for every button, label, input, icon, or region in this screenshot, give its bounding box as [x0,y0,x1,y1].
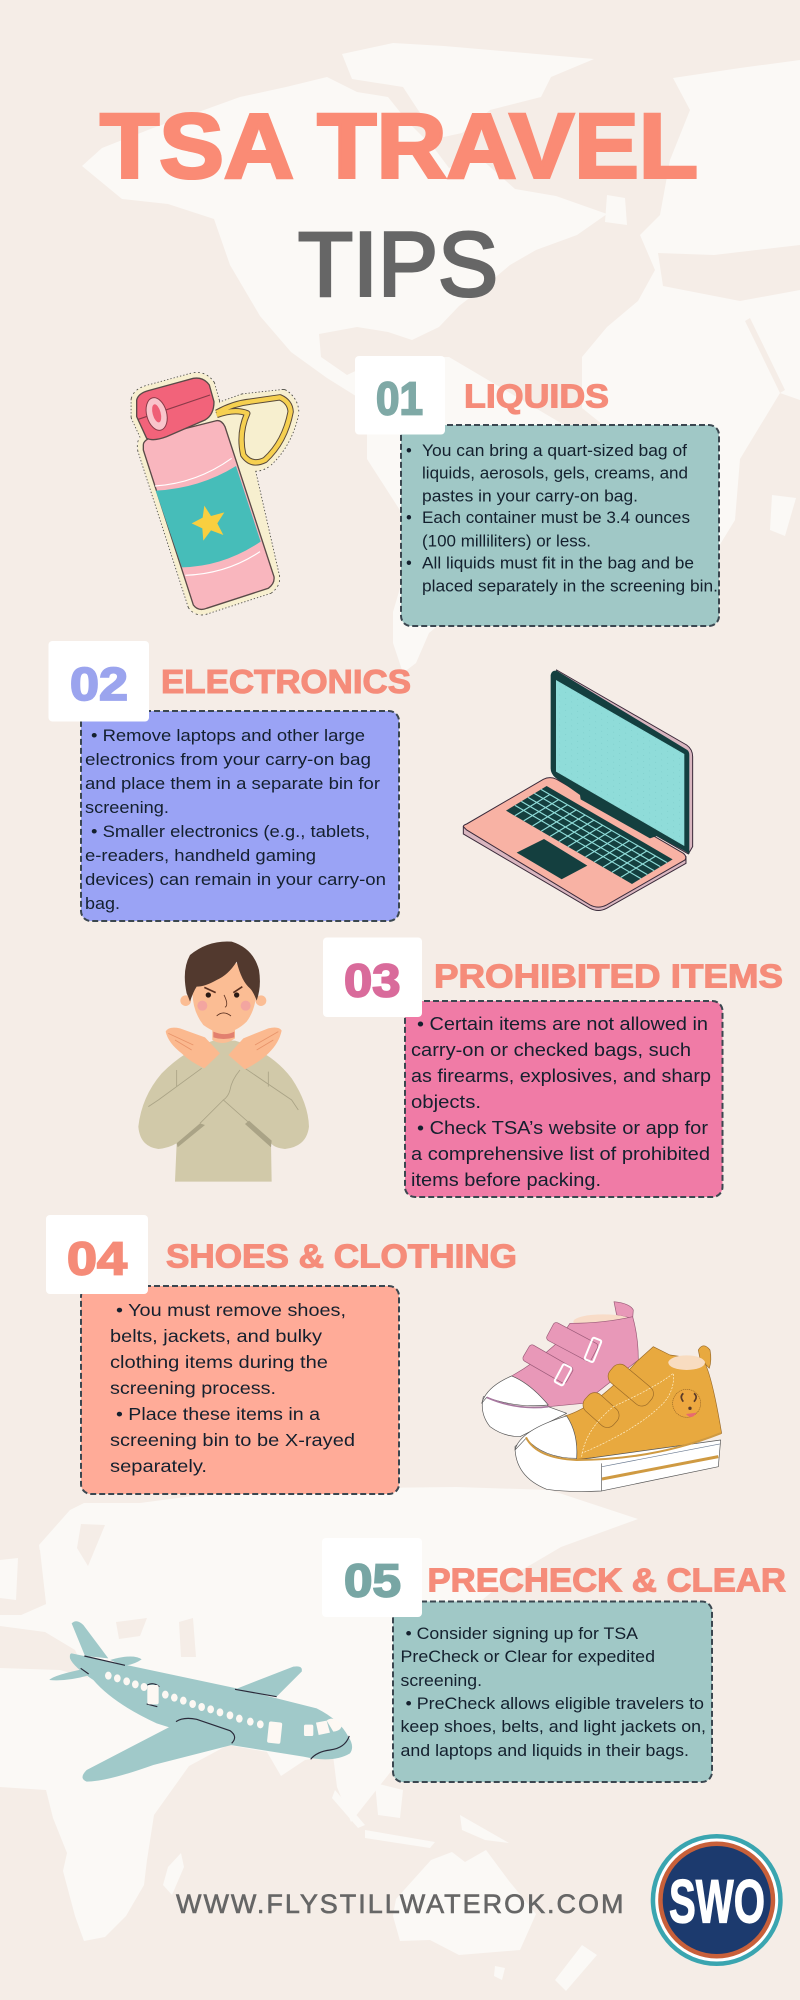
section 01: liquids [355,356,719,626]
prohibited items text [411,1014,711,1190]
icon: pair of shoes [482,1302,722,1492]
liquids text: • [406,509,412,527]
liquids text: Each container must be 3.4 ounces [422,509,690,527]
shoes and clothing text: • You must remove shoes, [116,1300,346,1320]
number tile 02 [48,641,149,722]
precheck and clear text: • Consider signing up for TSA [406,1625,638,1643]
electronics text: e-readers, handheld gaming [85,847,316,865]
shoes and clothing text [110,1300,355,1476]
liquids text: placed separately in the screening bin. [422,578,718,596]
number tile 04 [46,1215,148,1294]
electronics text: devices) can remain in your carry-on [85,871,386,889]
electronics text: bag. [85,895,120,913]
shoes and clothing text: clothing items during the [110,1352,328,1372]
number tile 03 [323,938,422,1017]
heading: precheck and clear: PRECHECK & CLEAR [428,1562,786,1600]
number 04: 04 [67,1232,127,1284]
section 02: electronics [48,641,411,921]
logo: SWO badge [651,1834,783,1966]
number 03: 03 [344,954,400,1006]
heading: prohibited items: PROHIBITED ITEMS [434,958,783,996]
shoes and clothing text: • Place these items in a [116,1404,320,1424]
title: TSA TRAVEL [100,96,698,198]
prohibited items text: as firearms, explosives, and sharp [411,1066,711,1086]
liquids text: liquids, aerosols, gels, creams, and [422,464,688,482]
heading: liquids: LIQUIDS [464,378,609,416]
precheck and clear text: keep shoes, belts, and light jackets on, [400,1718,706,1736]
electronics text: • Remove laptops and other large [91,727,365,745]
precheck and clear text: screening. [400,1672,482,1690]
precheck and clear text: • PreCheck allows eligible travelers to [406,1695,704,1713]
prohibited items text: items before packing. [411,1170,601,1190]
liquids text [406,442,718,596]
heading: electronics: ELECTRONICS [161,664,411,701]
liquids text: • [406,554,412,572]
panel: electronics [81,711,399,921]
section 05: precheck and clear [322,1538,786,1782]
precheck and clear text: PreCheck or Clear for expedited [400,1648,655,1666]
electronics text [85,727,386,913]
world map: bottom seas [0,1524,196,1678]
prohibited items text: • Certain items are not allowed in [417,1014,708,1034]
icon: water bottle [137,378,293,609]
section 04: shoes and clothing [46,1215,517,1494]
prohibited items text: • Check TSA’s website or app for [417,1118,708,1138]
title: TIPS [298,214,498,316]
number 05: 05 [344,1554,401,1606]
world map: top [82,43,800,673]
shoes and clothing text: separately. [110,1456,207,1476]
number tile 01 [355,356,445,434]
shoes and clothing text: belts, jackets, and bulky [110,1326,322,1346]
panel: prohibited items [405,1001,722,1197]
shoes and clothing text: screening bin to be X-rayed [110,1430,355,1450]
panel: precheck and clear [393,1602,712,1782]
liquids text: (100 milliliters) or less. [422,532,591,550]
liquids text: • [406,442,412,460]
title [100,96,698,316]
section 03: prohibited items [323,938,783,1197]
panel: liquids [401,425,719,626]
shoes and clothing text: screening process. [110,1378,276,1398]
world map: top seas [658,245,800,393]
prohibited items text: objects. [411,1092,481,1112]
liquids text: You can bring a quart-sized bag of [422,442,687,460]
electronics text: • Smaller electronics (e.g., tablets, [91,823,370,841]
heading: shoes and clothing: SHOES & CLOTHING [166,1238,517,1276]
prohibited items text: carry-on or checked bags, such [411,1040,691,1060]
icon: laptop [463,670,693,910]
electronics text: and place them in a separate bin for [85,775,381,793]
liquids text: All liquids must fit in the bag and be [422,554,694,572]
number tile 05 [322,1538,422,1617]
icon: airplane [49,1621,352,1782]
website url: WWW.FLYSTILLWATEROK.COM [176,1889,624,1919]
electronics text: electronics from your carry-on bag [85,751,371,769]
icon: man with crossed arms [138,941,309,1182]
panel: shoes and clothing [81,1286,399,1494]
number 02: 02 [70,658,128,710]
electronics text: screening. [85,799,169,817]
number 01: 01 [376,372,423,424]
world map: bottom [0,1487,638,1991]
precheck and clear text: and laptops and liquids in their bags. [400,1742,689,1760]
prohibited items text: a comprehensive list of prohibited [411,1144,710,1164]
liquids text: pastes in your carry-on bag. [422,488,638,506]
precheck and clear text [400,1625,706,1760]
